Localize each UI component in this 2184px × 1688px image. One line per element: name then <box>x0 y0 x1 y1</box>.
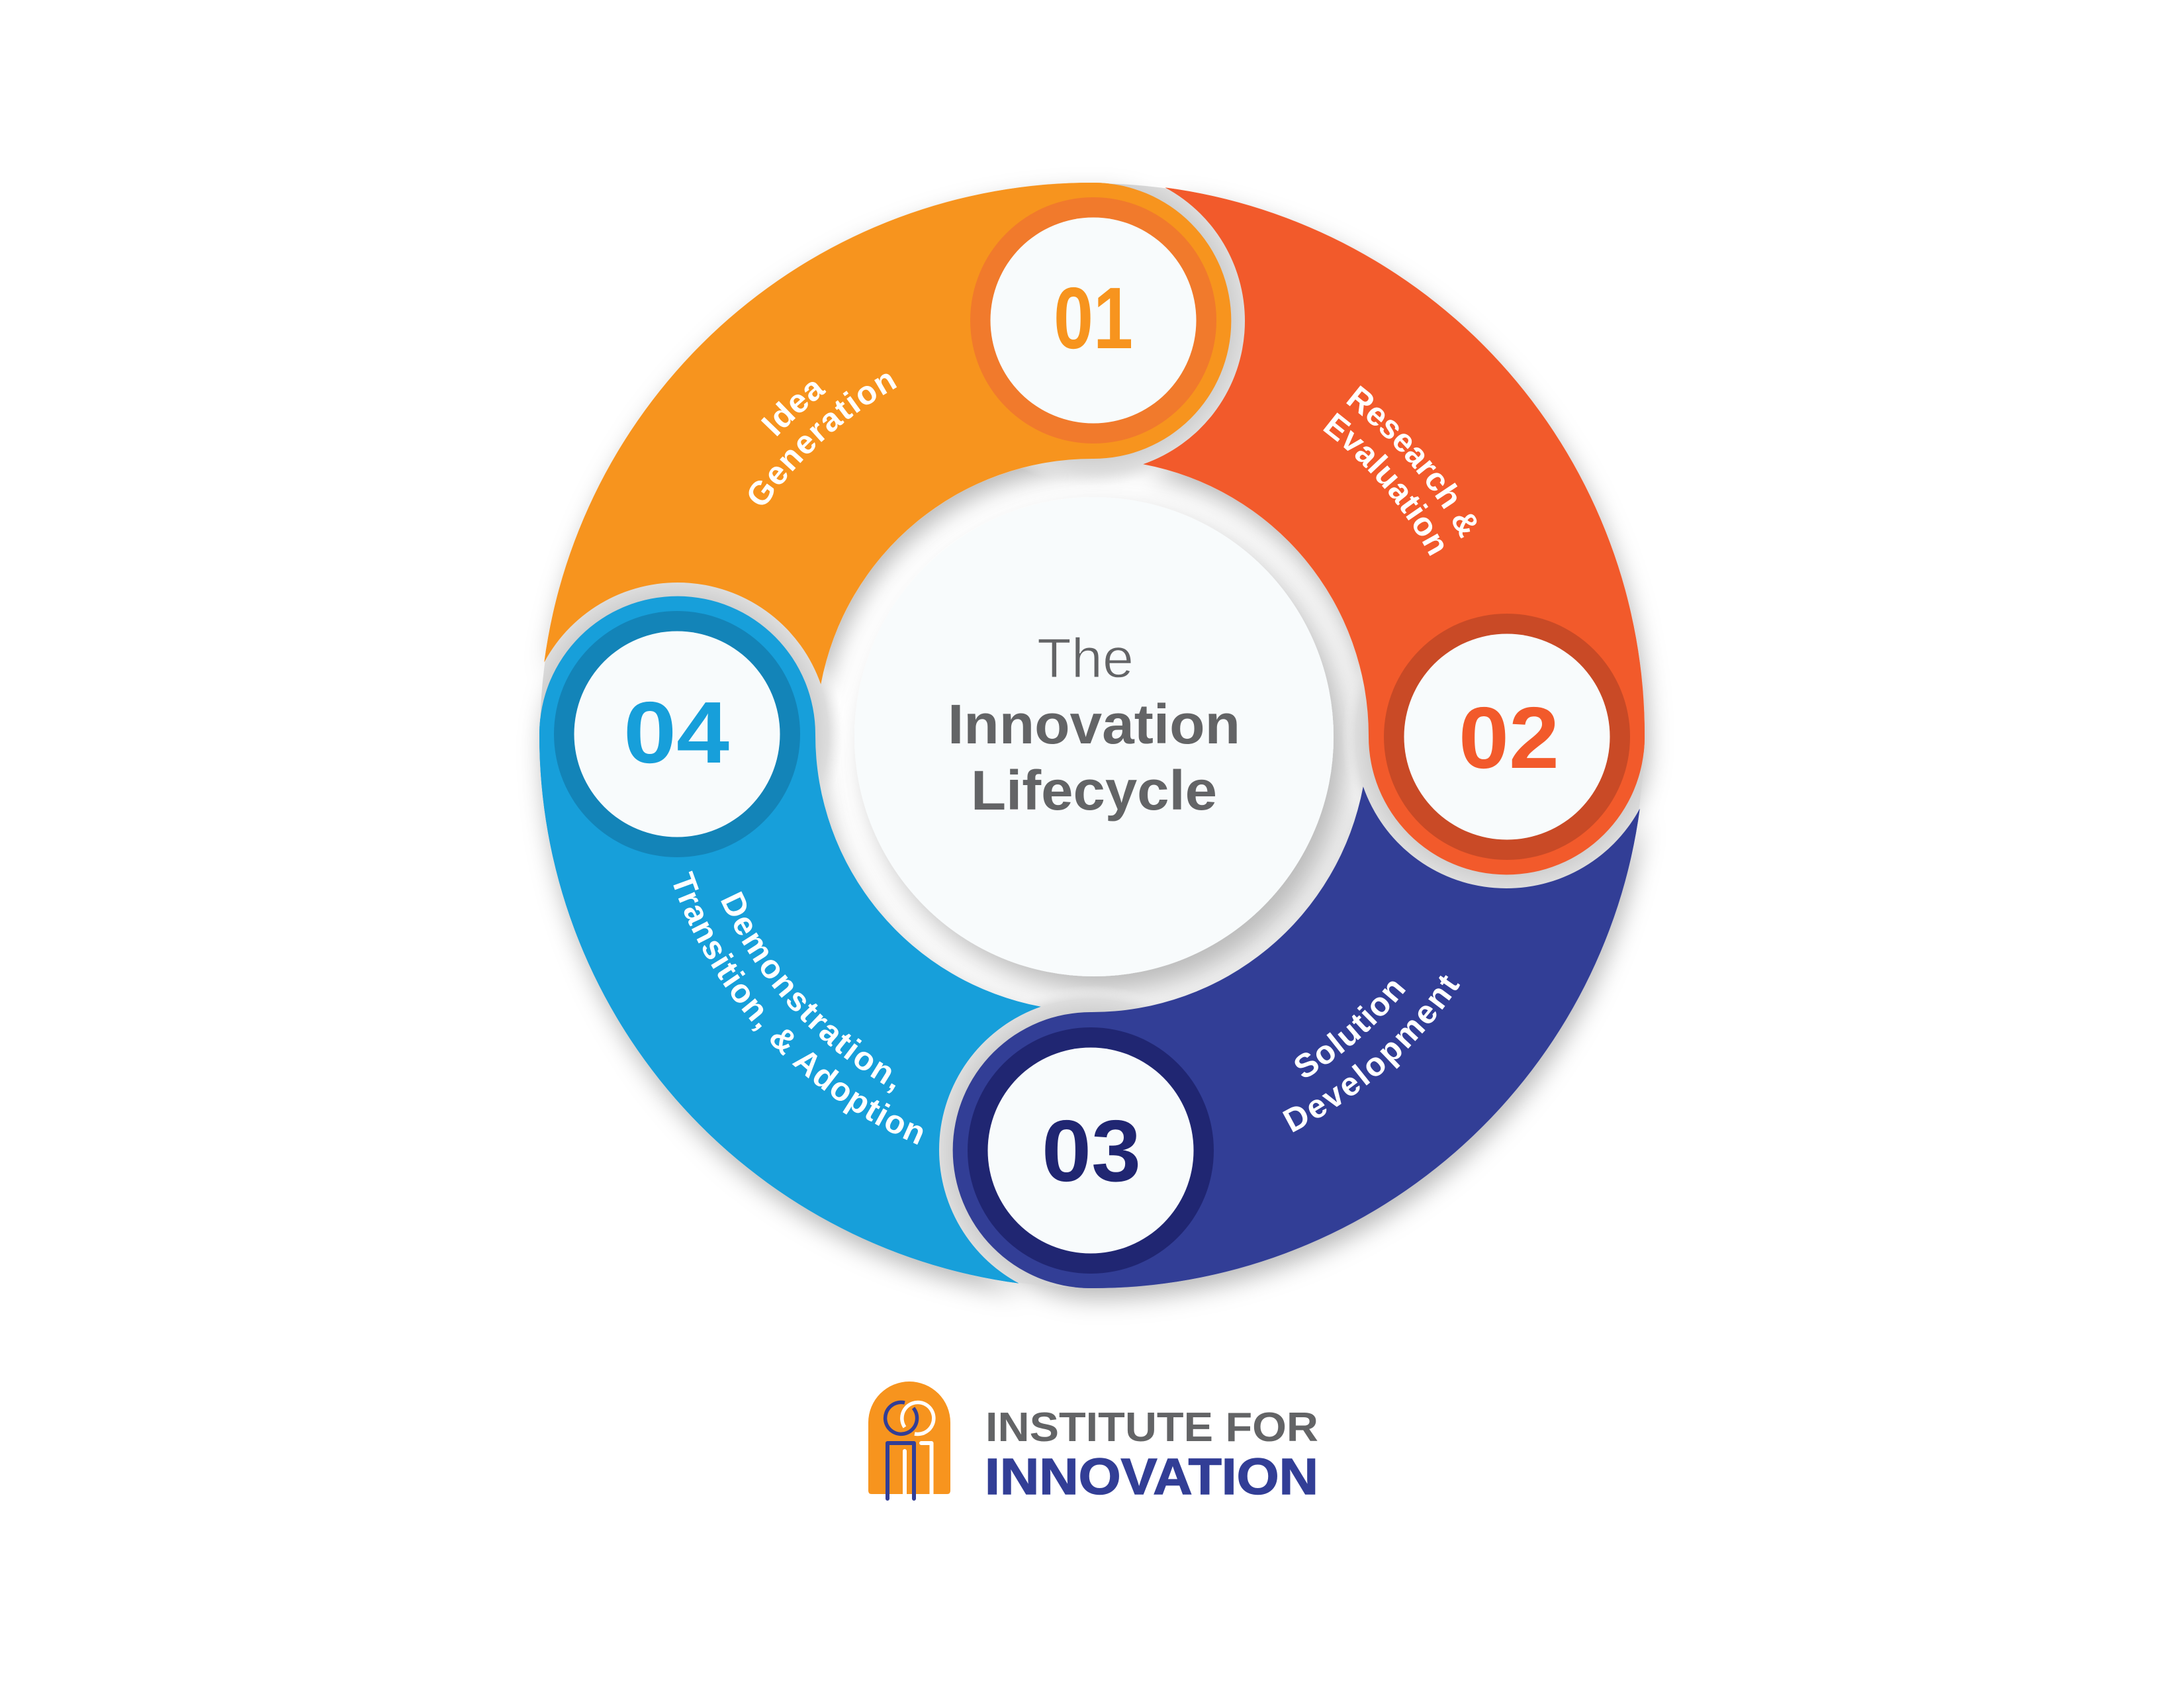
lifecycle diagram <box>529 180 1661 1312</box>
logo text: INNOVATION <box>985 1448 1318 1505</box>
label: Research & Evaluation: Research & <box>1346 385 1477 539</box>
segment: navy <box>952 785 1640 1290</box>
logo text: INSTITUTE FOR <box>985 1405 1318 1450</box>
label: Demonstration, Transition, & Adoption: Demonstration, <box>721 891 896 1094</box>
label: Demonstration, Transition, & Adoption: Transition, & Adoption <box>673 870 923 1145</box>
segment: red <box>1142 187 1647 875</box>
label: Idea Generation: Idea <box>761 382 826 437</box>
center title: The <box>1037 627 1134 689</box>
center title <box>948 627 1240 821</box>
center title: Innovation <box>948 693 1240 755</box>
label: Solution Development: Development <box>1283 975 1460 1132</box>
node 04: 04 <box>623 684 729 781</box>
node 02: 02 <box>1459 689 1559 786</box>
ring segments <box>537 181 1647 1290</box>
segment: orange <box>544 181 1232 686</box>
node 03: 03 <box>1042 1102 1141 1199</box>
label: Idea Generation: Generation <box>749 373 897 504</box>
node 03 <box>968 1027 1214 1274</box>
node 04 <box>554 611 800 857</box>
center title: Lifecycle <box>971 759 1217 821</box>
label: Research & Evaluation: Evaluation <box>1323 412 1444 556</box>
ring drop shadow <box>537 181 1647 1290</box>
node 01 <box>970 197 1216 444</box>
logo text <box>985 1405 1318 1505</box>
segment: light blue <box>537 596 1042 1284</box>
logo: Institute for Innovation <box>868 1382 1318 1505</box>
logo icon <box>868 1382 950 1499</box>
center disc <box>854 497 1334 976</box>
node halo shadows <box>512 155 1672 1316</box>
node 02 <box>1384 614 1630 860</box>
node 01: 01 <box>1054 269 1133 367</box>
label: Solution Development: Solution <box>1295 981 1406 1078</box>
